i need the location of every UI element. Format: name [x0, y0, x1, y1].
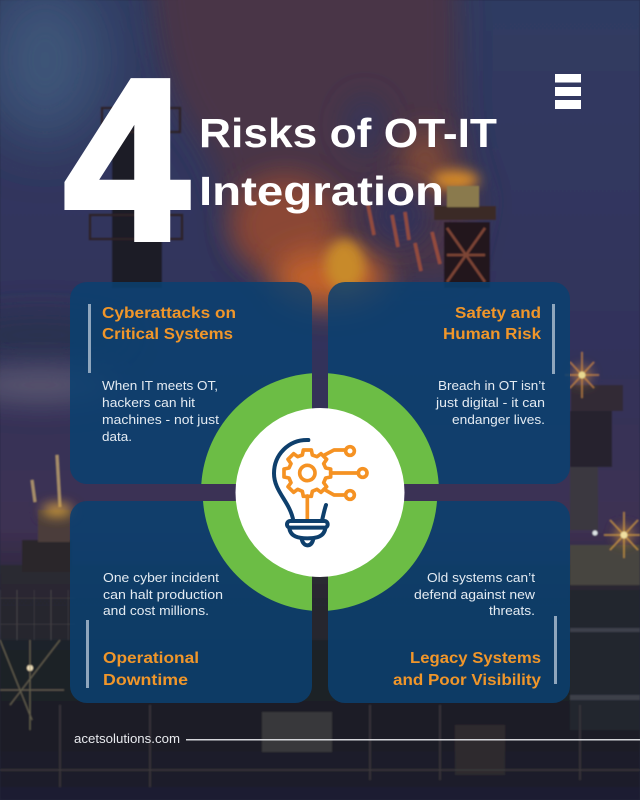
panel: legacy systems and poor visibility: threats. — [489, 603, 535, 618]
body: One cyber incident — [103, 570, 219, 585]
panel: safety and human risk — [328, 282, 570, 484]
panel: legacy systems and poor visibility: and Poor Visibility — [393, 672, 541, 689]
panel: operational downtime: can halt production — [103, 587, 223, 602]
green ring — [201, 373, 439, 611]
white centre circle — [236, 408, 404, 577]
heading: Safety and — [455, 305, 541, 322]
panel: operational downtime — [70, 501, 312, 703]
panel: cyberattacks on critical systems — [70, 282, 312, 484]
accent bar — [86, 620, 89, 688]
body: When IT meets OT, — [102, 378, 218, 393]
accent bar — [552, 304, 555, 374]
accent bar — [554, 616, 557, 684]
accent bar — [88, 304, 91, 373]
gear and circuit — [284, 447, 367, 520]
panel: safety and human risk: Human Risk — [443, 326, 541, 343]
big number 4: 4 — [64, 34, 188, 288]
panel: cyberattacks on critical systems: data. — [102, 429, 132, 444]
panel: operational downtime: Downtime — [103, 672, 188, 689]
body: Old systems can’t — [427, 570, 535, 585]
title: Integration — [199, 168, 444, 214]
panel: operational downtime: and cost millions. — [103, 603, 209, 618]
heading: Legacy Systems — [410, 650, 541, 667]
title: Risks of OT-IT — [199, 110, 497, 156]
icon: menu bars — [555, 74, 581, 109]
panel: legacy systems and poor visibility — [328, 501, 570, 703]
panel: cyberattacks on critical systems: hackers can hit — [102, 395, 195, 410]
panel: legacy systems and poor visibility: defend against new — [414, 587, 536, 602]
footer website: acetsolutions.com — [74, 731, 180, 746]
heading: Cyberattacks on — [102, 305, 236, 322]
panel: cyberattacks on critical systems: Critical Systems — [102, 326, 233, 343]
icon: light bulb with gear — [274, 440, 367, 545]
body: Breach in OT isn’t — [438, 378, 545, 393]
heading: Operational — [103, 650, 199, 667]
title — [199, 110, 497, 214]
panel: cyberattacks on critical systems: machines - not just — [102, 412, 219, 427]
panel: safety and human risk: endanger lives. — [452, 412, 545, 427]
bulb outline and base — [274, 440, 328, 545]
panel: safety and human risk: just digital - it can — [435, 395, 545, 410]
